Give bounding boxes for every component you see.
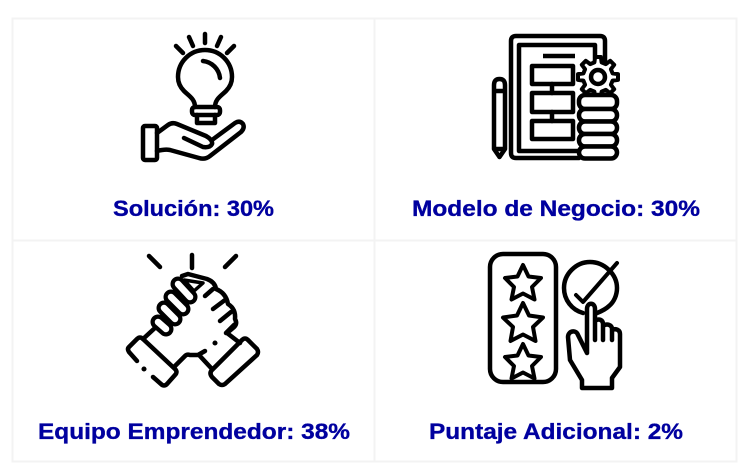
icon: star rating with pointing hand [490, 254, 620, 388]
icon: business model board with gear and coins [494, 36, 618, 158]
heading: Solución 30%: Solución: 30% [113, 196, 274, 221]
icon: clasped hands [128, 255, 258, 386]
heading: Modelo de Negocio 30%: Modelo de Negocio: 30% [412, 196, 700, 221]
heading: Puntaje Adicional 2%: Puntaje Adicional: 2% [429, 419, 683, 444]
icon: light bulb on open hand [143, 34, 244, 160]
panel: Puntaje Adicional [374, 240, 736, 462]
panel: Solución [12, 18, 374, 240]
panel: Modelo de Negocio [374, 18, 736, 240]
panel: Equipo Emprendedor [12, 240, 374, 462]
heading: Equipo Emprendedor 38%: Equipo Emprendedor: 38% [38, 419, 350, 444]
